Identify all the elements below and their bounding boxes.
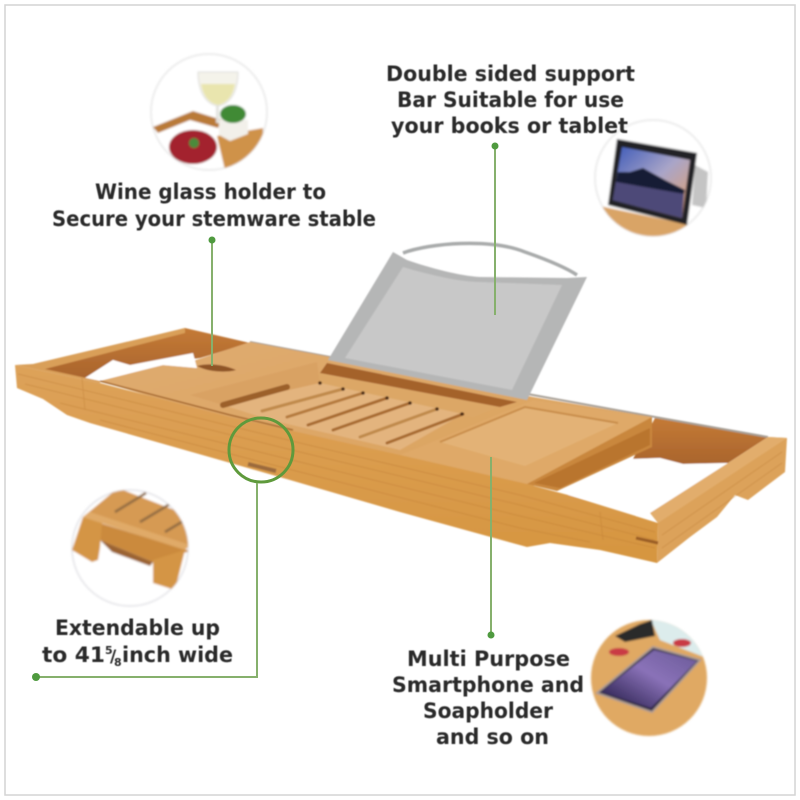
green highlight ring: [229, 418, 293, 482]
extendable text: to 41: [42, 643, 105, 667]
bamboo bath caddy tray: [15, 243, 787, 563]
callout: multi purpose: [392, 457, 712, 749]
main deck: [100, 342, 652, 488]
multi purpose text: Soapholder: [423, 699, 554, 723]
circle photo: wine glass: [151, 54, 267, 170]
wine glass leader line: [208, 236, 216, 366]
deck seam: [100, 381, 293, 430]
extendable text: inch wide: [122, 643, 233, 667]
right end: [652, 437, 787, 563]
circle photo: extension leg: [72, 488, 200, 606]
circle photo: tablet on tray: [591, 618, 712, 736]
back wall: left window: [33, 328, 250, 378]
callout: double sided support: [386, 62, 711, 315]
support text: Bar Suitable for use: [397, 88, 624, 112]
callout: wine glass holder: [52, 54, 376, 366]
back edge highlight: [250, 342, 768, 437]
soap tray: [400, 400, 652, 491]
support text: your books or tablet: [391, 114, 628, 138]
multi purpose text: Multi Purpose: [407, 647, 570, 671]
slat field: [223, 381, 464, 450]
front face: [15, 365, 658, 563]
circle photo: tablet: [595, 120, 711, 240]
extendable text: [42, 616, 233, 669]
support text: Double sided support: [386, 62, 635, 86]
support handle: [403, 243, 577, 275]
back wall: right window: [633, 418, 768, 464]
end joint marks: [636, 538, 658, 543]
extendable text: Extendable up: [55, 616, 220, 640]
left window opening: [85, 353, 197, 380]
multi purpose text: and so on: [436, 725, 549, 749]
tray end face: [527, 417, 652, 491]
wood grain: [18, 374, 782, 548]
wine glass text: Wine glass holder to: [95, 180, 326, 204]
extendable text: 5: [105, 644, 113, 657]
fabric hinge strip: [320, 363, 517, 407]
wine glass slot: [197, 364, 236, 372]
fabric mesh: [345, 267, 562, 390]
extendable leader line: [32, 483, 257, 681]
right window opening: [568, 458, 728, 513]
book support fabric: [328, 243, 587, 400]
extendable text: 8: [114, 656, 122, 669]
multi purpose leader line: [488, 457, 494, 638]
slat rail: [190, 362, 320, 405]
callout: extendable width: [32, 418, 293, 681]
back rail: [318, 373, 497, 417]
multi purpose text: Smartphone and: [392, 673, 584, 697]
extendable text: /: [110, 647, 117, 667]
wine glass text: Secure your stemware stable: [52, 207, 376, 231]
left rim: [15, 328, 185, 383]
fabric border: [328, 252, 587, 400]
support leader line: [492, 142, 498, 315]
slat end notches: [318, 381, 464, 416]
